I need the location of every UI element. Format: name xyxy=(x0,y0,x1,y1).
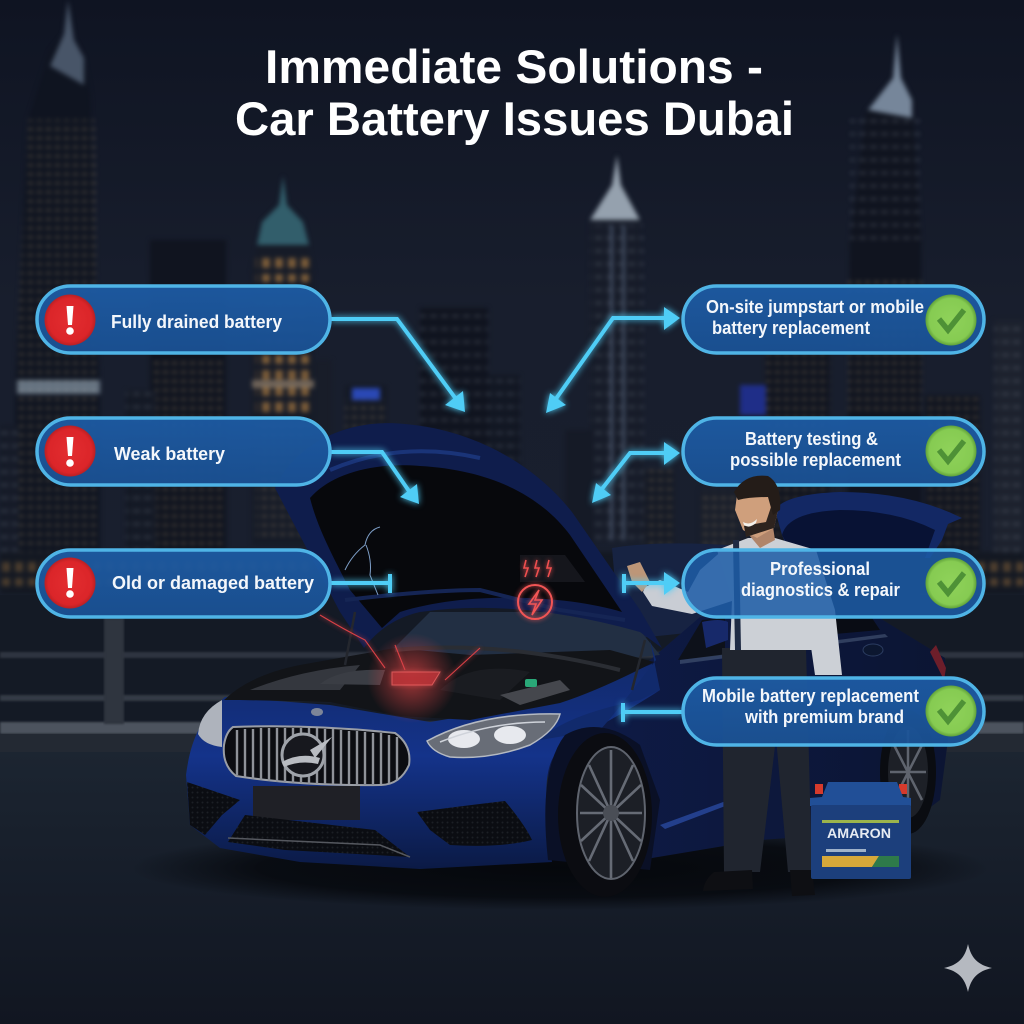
left headlight xyxy=(198,700,222,747)
title: Immediate Solutions - xyxy=(265,40,763,93)
battery: Amaron xyxy=(810,782,911,879)
right headlight xyxy=(427,714,560,758)
car: blue sedan with open hood xyxy=(186,423,962,897)
battery brand: AMARON xyxy=(827,825,891,841)
bumper intakes xyxy=(187,782,532,857)
background: harbour water and railing xyxy=(0,595,1024,755)
car front body xyxy=(186,664,660,869)
technician left arm xyxy=(643,548,735,614)
far left tower xyxy=(15,0,100,560)
arrow: on-site jumpstart xyxy=(546,307,680,413)
engine bay xyxy=(224,648,654,720)
panel: solution battery testing xyxy=(683,418,984,485)
technician hand xyxy=(627,562,650,592)
technician legs xyxy=(722,648,812,872)
windshield xyxy=(392,612,660,665)
technician body xyxy=(627,538,842,896)
tower seven xyxy=(847,34,922,560)
blue lightning on hood xyxy=(345,527,380,595)
background: Dubai skyline xyxy=(0,0,1024,594)
arrow: old or damaged battery xyxy=(331,574,390,593)
tower four xyxy=(345,308,520,545)
icon: green check xyxy=(926,426,976,476)
technician shoes xyxy=(703,870,815,896)
background: night sky xyxy=(0,0,1024,760)
panel: problem weak battery xyxy=(37,418,330,485)
icon: red alert xyxy=(44,558,96,608)
technician head xyxy=(734,476,780,548)
panel: solution professional diagnostics xyxy=(683,550,984,617)
red warning icon on hood xyxy=(518,560,552,619)
icon: red alert xyxy=(44,426,96,476)
label: battery replacement xyxy=(712,318,870,338)
ground: asphalt xyxy=(0,752,1024,1024)
icon: red alert xyxy=(44,294,96,346)
grille xyxy=(224,726,409,785)
panel: problem old or damaged battery xyxy=(37,550,330,617)
car side body xyxy=(540,617,948,860)
tower eight xyxy=(925,320,1024,570)
label: Battery testing & xyxy=(745,429,878,449)
arrow: battery testing xyxy=(592,442,680,503)
suspenders xyxy=(733,540,741,650)
label: Mobile battery replacement xyxy=(702,686,919,706)
car shadow xyxy=(130,826,990,910)
car rear: roof and open trunk xyxy=(612,492,962,640)
hood underside and panel xyxy=(275,423,662,648)
icon: green check xyxy=(926,558,976,608)
rear wheel xyxy=(880,710,936,834)
hood badge xyxy=(311,708,323,716)
red glow in engine bay xyxy=(367,633,457,723)
arrow: mobile battery replacement xyxy=(623,703,684,722)
red battery fault outline xyxy=(320,615,480,685)
panel: solution on-site jumpstart xyxy=(683,286,984,353)
tower five xyxy=(565,155,740,550)
arrow: weak battery xyxy=(331,452,419,504)
technician shirt xyxy=(717,538,842,675)
icon: sparkle watermark xyxy=(944,944,992,992)
hood struts xyxy=(345,612,645,690)
arrow: professional diagnostics xyxy=(624,572,680,595)
label: Old or damaged battery xyxy=(112,573,314,593)
icon: green check xyxy=(926,686,976,736)
label: with premium brand xyxy=(744,707,904,727)
title: Car Battery Issues Dubai xyxy=(235,92,794,145)
arrow: fully drained battery xyxy=(331,319,465,412)
tower six xyxy=(740,350,830,550)
panel: solution mobile battery replacement xyxy=(683,678,984,745)
label: On-site jumpstart or mobile xyxy=(706,297,924,317)
label: Professional xyxy=(770,559,870,579)
tower two xyxy=(126,240,226,560)
icon: green check xyxy=(926,294,976,346)
front wheel xyxy=(545,727,660,897)
label: Fully drained battery xyxy=(111,312,282,332)
side window and door details xyxy=(660,618,946,829)
label: possible replacement xyxy=(730,450,901,470)
panel: problem fully drained battery xyxy=(37,286,330,353)
shoreline city glow xyxy=(0,552,1024,594)
label: diagnostics & repair xyxy=(741,580,900,600)
tower three xyxy=(252,176,332,550)
licence plate xyxy=(253,786,360,820)
label: Weak battery xyxy=(114,444,225,464)
